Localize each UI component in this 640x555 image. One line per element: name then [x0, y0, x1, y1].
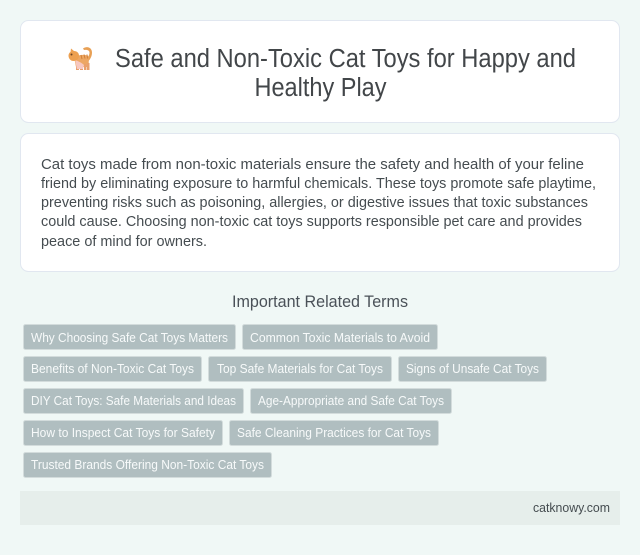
tag [24, 388, 244, 414]
title text: Safe and Non-Toxic Cat Toys for Happy and [115, 45, 576, 73]
panel: description card [20, 134, 620, 272]
tag: Age-Appropriate and Safe Cat Toys [258, 393, 444, 408]
description text: preventing risks such as poisoning, allergies, or digestive issues that toxic substances [41, 194, 588, 211]
tag [24, 324, 236, 350]
tag: Trusted Brands Offering Non-Toxic Cat Toys [31, 457, 264, 472]
footer bar [20, 491, 620, 525]
tag [250, 388, 452, 414]
title text [115, 45, 576, 102]
description text: could cause. Choosing non-toxic cat toys supports responsible pet care and provides [41, 213, 582, 230]
tag [398, 356, 546, 382]
tag: Top Safe Materials for Cat Toys [217, 361, 383, 376]
tag [208, 356, 392, 382]
tag: Benefits of Non-Toxic Cat Toys [31, 361, 194, 376]
tag [24, 356, 202, 382]
tag: Signs of Unsafe Cat Toys [406, 361, 539, 376]
footer text: site name: catknowy.com [533, 500, 610, 515]
icon: cat emoji [68, 47, 92, 70]
description text: friend by eliminating exposure to harmful chemicals. These toys promote safe playtime, [41, 175, 596, 192]
tag [230, 420, 438, 446]
tag: How to Inspect Cat Toys for Safety [31, 425, 216, 440]
tag: Common Toxic Materials to Avoid [250, 330, 430, 345]
description text: peace of mind for owners. [41, 233, 207, 250]
tag [24, 452, 272, 478]
description text: Cat toys made from non-toxic materials ensure the safety and health of your feline [41, 156, 584, 173]
title text: Healthy Play [254, 74, 387, 102]
tag [24, 420, 222, 446]
tag: Why Choosing Safe Cat Toys Matters [31, 330, 228, 345]
panel: related term tags [24, 324, 546, 478]
panel: title card [20, 20, 620, 122]
tag: DIY Cat Toys: Safe Materials and Ideas [31, 393, 236, 408]
description text [41, 156, 596, 250]
heading: important related terms: Important Related Terms [232, 292, 408, 311]
tag [242, 324, 438, 350]
tag: Safe Cleaning Practices for Cat Toys [237, 425, 431, 440]
